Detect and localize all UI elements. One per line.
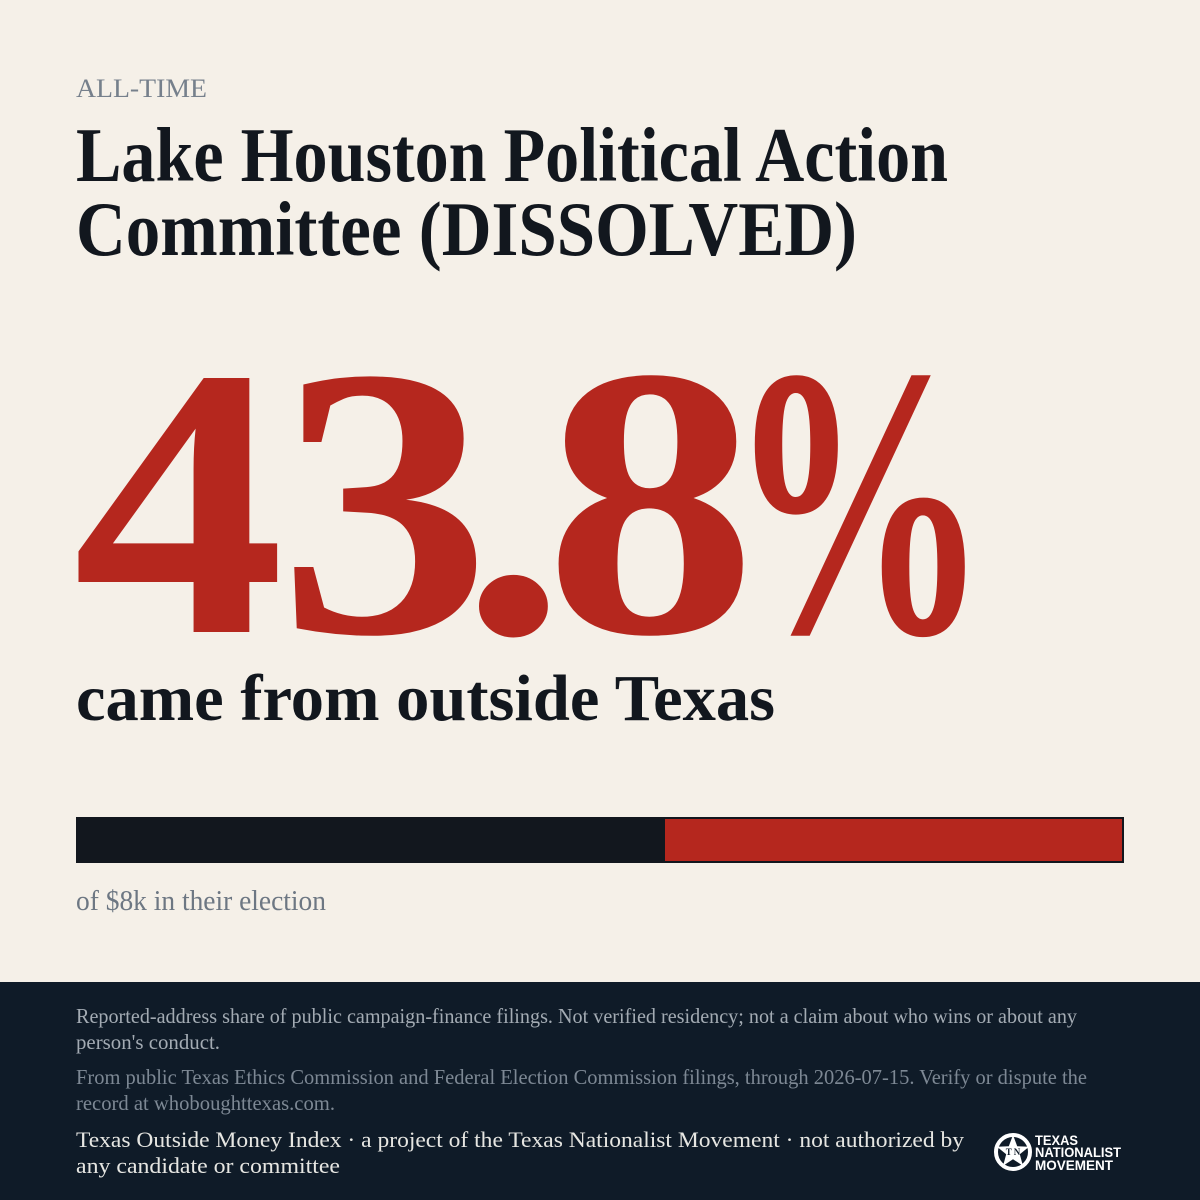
disclaimer: person's conduct.	[76, 1030, 220, 1054]
big statistic: 43.8%: 43.8	[73, 288, 757, 716]
eyebrow: time range: ALL-TIME	[76, 74, 207, 103]
source note	[76, 1065, 1087, 1115]
attribution	[76, 1127, 964, 1178]
disclaimer	[76, 1004, 1077, 1054]
source note: record at whoboughttexas.com.	[76, 1091, 335, 1115]
bar caption: of $8k in their election	[76, 885, 326, 917]
logo wordmark: MOVEMENT	[1035, 1157, 1113, 1173]
icon: star in circle: T N	[1006, 1147, 1021, 1157]
big statistic: 43.8%: %	[728, 289, 989, 716]
attribution: any candidate or committee	[76, 1153, 340, 1178]
progress bar: in-state vs outside share	[76, 817, 1124, 863]
subheading: came from outside Texas	[76, 662, 775, 735]
title	[76, 112, 948, 272]
panel: footer	[0, 982, 1200, 1200]
logo wordmark: TEXAS	[1035, 1132, 1078, 1148]
title: Lake Houston Political Action	[76, 112, 948, 198]
source note: From public Texas Ethics Commission and Federal Election Commission filings, through 2026-07-15. Verify or dispute the	[76, 1065, 1087, 1089]
title: Committee (DISSOLVED)	[76, 186, 857, 272]
logo: Texas Nationalist Movement	[996, 1132, 1121, 1173]
logo wordmark: NATIONALIST	[1035, 1144, 1121, 1160]
logo wordmark	[1035, 1132, 1121, 1173]
attribution: Texas Outside Money Index · a project of the Texas Nationalist Movement · not authorized by	[76, 1127, 964, 1152]
disclaimer: Reported-address share of public campaign-finance filings. Not verified residency; not a claim about who wins or about any	[76, 1004, 1077, 1028]
